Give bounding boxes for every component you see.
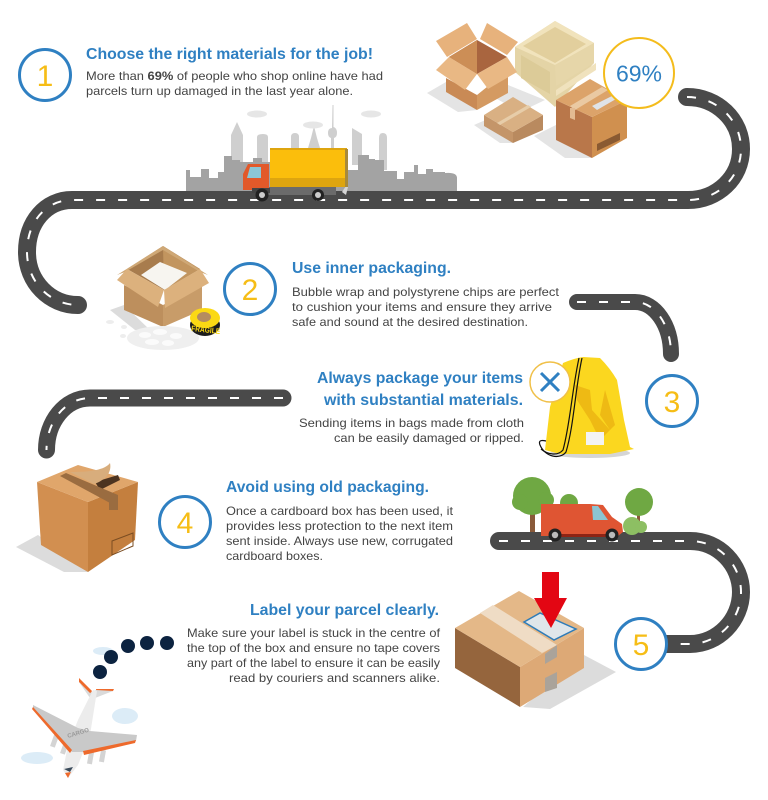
step 3 heading bbox=[317, 370, 523, 409]
road 2 bbox=[577, 302, 671, 354]
step 5 heading: Label your parcel clearly. bbox=[250, 602, 439, 619]
icon: cargo plane bbox=[32, 678, 137, 778]
step 1 number bbox=[20, 50, 70, 100]
step 4 text: sent inside. Always use new, corrugated bbox=[226, 534, 453, 548]
step 4 heading: Avoid using old packaging. bbox=[226, 479, 429, 496]
step 5 text: read by couriers and scanners alike. bbox=[229, 671, 440, 685]
clouds bbox=[21, 647, 138, 764]
step 5 number bbox=[616, 618, 666, 670]
icon: box with packing chips bbox=[106, 246, 221, 350]
road 1 bbox=[27, 97, 741, 305]
step 5 text: Make sure your label is stuck in the centre of bbox=[187, 626, 441, 640]
step 1 number: 1 bbox=[37, 60, 53, 93]
step 2 text: safe and sound at the desired destination. bbox=[292, 315, 528, 329]
step 2 heading: Use inner packaging. bbox=[292, 260, 451, 277]
step 4 text bbox=[226, 504, 454, 563]
callout: 69%: 69% bbox=[616, 60, 662, 86]
step 1 text: More than 69% of people who shop online have had bbox=[86, 69, 383, 83]
icon: cross callout bbox=[530, 362, 570, 402]
road 4 bbox=[499, 541, 741, 644]
step 3 text: Sending items in bags made from cloth bbox=[299, 416, 524, 430]
callout: 69% bbox=[604, 38, 674, 108]
step 4 number: 4 bbox=[177, 507, 193, 540]
road 3 bbox=[46, 398, 283, 450]
step 3 text: can be easily damaged or ripped. bbox=[334, 431, 524, 445]
step 4 text: cardboard boxes. bbox=[226, 549, 323, 563]
step 2 text: Bubble wrap and polystyrene chips are perfect bbox=[292, 285, 560, 299]
icon: trees bbox=[512, 477, 653, 535]
step 4 text: provides less protection to the next item bbox=[226, 519, 453, 533]
step 4 number bbox=[160, 496, 210, 548]
lorry bbox=[243, 148, 348, 202]
step 2 number: 2 bbox=[242, 274, 258, 307]
step 4 text: Once a cardboard box has been used, it bbox=[226, 504, 454, 518]
step 5 text: the top of the box and ensure no tape covers bbox=[187, 641, 440, 655]
step 3 number bbox=[646, 376, 698, 426]
step 5 number: 5 bbox=[633, 629, 649, 662]
step 1 heading: Choose the right materials for the job! bbox=[86, 46, 373, 63]
boxes group bbox=[427, 21, 627, 158]
icon: yellow cloth bag bbox=[539, 357, 634, 458]
step 5 text bbox=[187, 626, 441, 685]
step 3 heading: with substantial materials. bbox=[323, 392, 523, 409]
flight path dots bbox=[93, 636, 174, 679]
arrow: red down arrow bbox=[534, 572, 567, 628]
icon: labelled parcel bbox=[455, 591, 616, 709]
step 3 heading: Always package your items bbox=[317, 370, 523, 387]
step 1 text bbox=[86, 69, 383, 98]
icon: box with packing chips: FRAGILE bbox=[191, 324, 221, 336]
van bbox=[541, 504, 623, 542]
step 5 text: any part of the label to ensure it can be easily bbox=[187, 656, 440, 670]
step 3 text bbox=[299, 416, 524, 445]
step 2 text bbox=[292, 285, 560, 329]
icon: cargo plane: CARGO bbox=[67, 728, 90, 740]
step 1 text: parcels turn up damaged in the last year alone. bbox=[86, 84, 353, 98]
city skyline bbox=[186, 105, 457, 191]
step 2 text: to cushion your items and ensure they arrive bbox=[292, 300, 552, 314]
step 3 number: 3 bbox=[664, 386, 680, 419]
icon: old damaged box bbox=[16, 463, 138, 572]
step 2 number bbox=[224, 264, 276, 314]
